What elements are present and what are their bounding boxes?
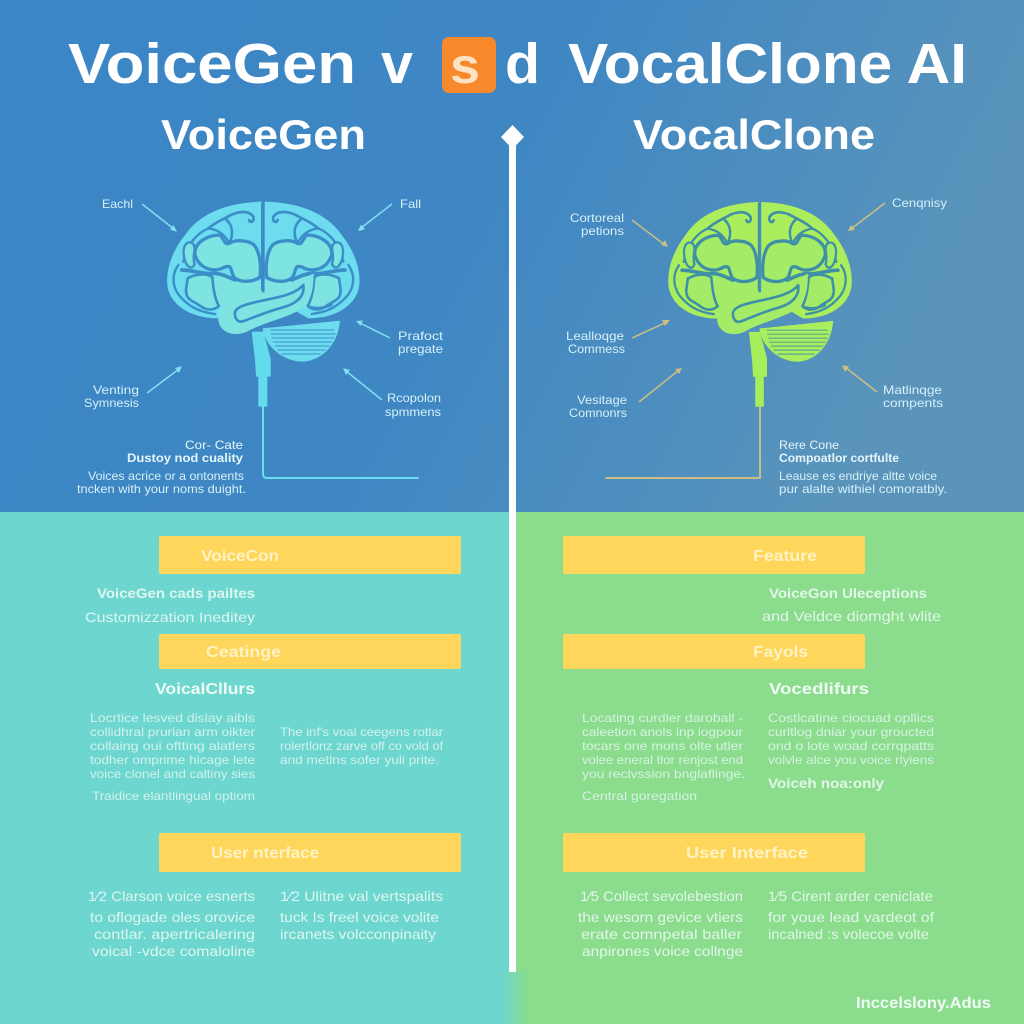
text block: left core quality: Dustoy nod cuality bbox=[127, 451, 243, 465]
text block: right interface column one: erate comnpetal baller bbox=[581, 926, 742, 942]
text block: left paragraph column one: collaing oui oftting alatlers bbox=[90, 739, 255, 753]
feature bar: Fayols bbox=[563, 634, 865, 669]
text block: left paragraph column one: Traidice elantlingual optiom bbox=[92, 789, 255, 803]
connector line: right brain bbox=[606, 407, 760, 478]
text block: right paragraph column two: Costlcatine ciocuad opllics bbox=[768, 711, 934, 725]
callout labels: right brain: petions bbox=[581, 224, 624, 238]
text block: right core quality: Compoatlor cortfulte bbox=[779, 451, 899, 465]
text block: right paragraph column two: Voiceh noa:only bbox=[768, 775, 884, 791]
text block: right interface column one: 1⁄5 Collect sevolebestion bbox=[580, 888, 743, 904]
text block: right interface column one bbox=[578, 888, 743, 959]
text block: right interface column one: the wesorn gevice vtiers bbox=[578, 909, 743, 925]
icon: green brain bbox=[668, 202, 852, 407]
callout labels: left brain: spmmens bbox=[385, 405, 441, 419]
text block: left interface column two: ircanets volcconpinaity bbox=[280, 926, 436, 942]
icon: orange s badge bbox=[442, 37, 496, 94]
title: d bbox=[505, 32, 540, 96]
text block: left paragraph column one: voice clonel and caltiny sies bbox=[90, 767, 255, 781]
background: bottom left teal panel bbox=[0, 512, 512, 1024]
text block: left paragraph column one: Locrtice lesved dislay aibls bbox=[90, 711, 255, 725]
footer credit: Inccelslony.Adus bbox=[856, 995, 991, 1012]
feature bar: User interface left: User nterface bbox=[211, 845, 319, 862]
callout labels: right brain: Comnonrs bbox=[569, 406, 627, 420]
text block: left interface column one: 1⁄2 Clarson voice esnerts bbox=[88, 888, 255, 904]
text block: left paragraph column one bbox=[90, 711, 255, 803]
callout labels: left brain: Venting bbox=[93, 383, 139, 397]
text block: right paragraph column one: volee eneral tlor renjost end bbox=[582, 753, 743, 767]
callout labels: left brain bbox=[84, 197, 444, 419]
callout labels: right brain: compents bbox=[883, 396, 943, 410]
text block: right core quality: pur alalte withiel comoratbly. bbox=[779, 482, 947, 496]
text block: VoiceGen features: VoiceGen cads pailtes bbox=[97, 585, 255, 601]
text block: right paragraph column one: Locating curdler daroball - bbox=[582, 711, 743, 725]
callout labels: left brain: Fall bbox=[400, 197, 421, 211]
text block: left interface column one bbox=[88, 888, 255, 959]
text block: right interface column two: for youe lead vardeot of bbox=[768, 909, 934, 925]
feature bar: Fayols: Fayols bbox=[753, 644, 808, 661]
text block: VocalClone features bbox=[762, 585, 941, 624]
feature bar: Ceatinge bbox=[159, 634, 461, 669]
subheading: VoicalCllurs: VoicalCllurs bbox=[155, 681, 255, 698]
text block: left interface column one: voical -vdce comaloline bbox=[92, 943, 255, 959]
text block: right interface column two: incalned :s volecoe volte bbox=[768, 926, 929, 942]
text block: right paragraph column two: curltlog dniar your groucted bbox=[768, 725, 934, 739]
feature bar: VoiceCon: VoiceCon bbox=[201, 548, 279, 565]
text block: right interface column two: 1⁄5 Cirent arder ceniclate bbox=[768, 888, 933, 904]
text block: left paragraph column one: todher omprime hicage lete bbox=[90, 753, 255, 767]
text block: left paragraph column one: collidhral prurian arm oikter bbox=[90, 725, 255, 739]
feature bar: Feature: Feature bbox=[753, 548, 817, 565]
text block: left interface column two: 1⁄2 Ulitne val vertspalits bbox=[280, 888, 443, 904]
text block: left paragraph column two: rolertlonz zarve off co vold of bbox=[280, 739, 444, 753]
icon: orange s badge: s bbox=[450, 38, 480, 94]
connector line: left brain bbox=[263, 407, 418, 478]
callout labels: right brain: Vesitage bbox=[577, 393, 627, 407]
text block: right paragraph column one: tocars one mons olte utler bbox=[582, 739, 743, 753]
callout labels: right brain bbox=[566, 196, 947, 420]
text block: left interface column two bbox=[280, 888, 443, 942]
subheading: Vocedlifurs: Vocedlifurs bbox=[769, 681, 869, 698]
text block: right paragraph column two bbox=[768, 711, 934, 791]
text block: left paragraph column two: The inf's voal ceegens rotlar bbox=[280, 725, 443, 739]
callout labels: right brain: Cenqnisy bbox=[892, 196, 947, 210]
title: VoiceGen bbox=[68, 32, 356, 96]
text block: left interface column one: contlar. apertricalering bbox=[94, 926, 255, 942]
center divider with diamond bbox=[501, 125, 524, 972]
feature bar: User interface left bbox=[159, 833, 461, 872]
text block: left core quality: Voices acrice or a ontonents bbox=[88, 469, 244, 483]
callout labels: right brain: Matlinqge bbox=[883, 383, 942, 397]
text block: right paragraph column one: Central goregation bbox=[582, 789, 697, 803]
callout labels: left brain: Rcopolon bbox=[387, 391, 441, 405]
arrows: right brain bbox=[632, 203, 885, 402]
text block: left core quality bbox=[77, 438, 246, 496]
text block: VocalClone features: and Veldce diomght wlite bbox=[762, 608, 941, 624]
text block: right interface column one: anpirones voice collnge bbox=[582, 943, 743, 959]
text block: right paragraph column two: ond o lote woad corrqpatts bbox=[768, 739, 934, 753]
text block: VocalClone features: VoiceGon Uleceptions bbox=[769, 585, 927, 601]
heading: VocalClone: VocalClone bbox=[633, 111, 875, 158]
text block: right interface column two bbox=[768, 888, 934, 942]
callout labels: left brain: Symnesis bbox=[84, 396, 139, 410]
feature bar: VoiceCon bbox=[159, 536, 461, 574]
text block: right core quality: Rere Cone bbox=[779, 438, 839, 452]
icon: blue brain bbox=[167, 202, 360, 407]
text block: right core quality: Leause es endriye altte voice bbox=[779, 469, 937, 483]
text block: left paragraph column two: and metlns sofer yuli prite. bbox=[280, 753, 439, 767]
text block: right paragraph column one bbox=[582, 711, 745, 803]
feature bar: User interface right bbox=[563, 833, 865, 872]
callout labels: left brain: Eachl bbox=[102, 197, 133, 211]
callout labels: right brain: Cortoreal bbox=[570, 211, 624, 225]
feature bar: Feature bbox=[563, 536, 865, 574]
heading: VoiceGen: VoiceGen bbox=[161, 111, 366, 158]
text block: VoiceGen features: Customizzation Ineditey bbox=[85, 609, 255, 625]
text block: left paragraph column two bbox=[280, 725, 444, 767]
title bbox=[68, 32, 967, 96]
callout labels: right brain: Commess bbox=[568, 342, 625, 356]
arrows: left brain bbox=[142, 204, 392, 400]
background: bottom right green panel bbox=[512, 512, 1024, 1024]
text block: left core quality: tncken with your noms duight. bbox=[77, 482, 246, 496]
background: top blue panel bbox=[0, 0, 1024, 512]
callout labels: left brain: Prafoct bbox=[398, 329, 444, 343]
text block: VoiceGen features bbox=[85, 585, 255, 625]
text block: right core quality bbox=[779, 438, 947, 496]
text block: left interface column two: tuck Is freel voice volite bbox=[280, 909, 439, 925]
callout labels: right brain: Lealloqge bbox=[566, 329, 624, 343]
title: v bbox=[381, 32, 413, 96]
text block: right paragraph column two: volvle alce you voice rlyiens bbox=[768, 753, 934, 767]
text block: left interface column one: to oflogade oles orovice bbox=[90, 909, 255, 925]
feature bar: User interface right: User Interface bbox=[686, 845, 808, 862]
background: soft seam at bottom bbox=[500, 972, 530, 1024]
text block: right paragraph column one: you reclvssion bnglaflinge. bbox=[582, 767, 745, 781]
text block: left core quality: Cor- Cate bbox=[185, 438, 243, 452]
text block: right paragraph column one: caleetion anols inp iogpour bbox=[582, 725, 743, 739]
feature bar: Ceatinge: Ceatinge bbox=[206, 644, 281, 661]
title: VocalClone AI bbox=[568, 32, 967, 96]
callout labels: left brain: pregate bbox=[398, 342, 443, 356]
